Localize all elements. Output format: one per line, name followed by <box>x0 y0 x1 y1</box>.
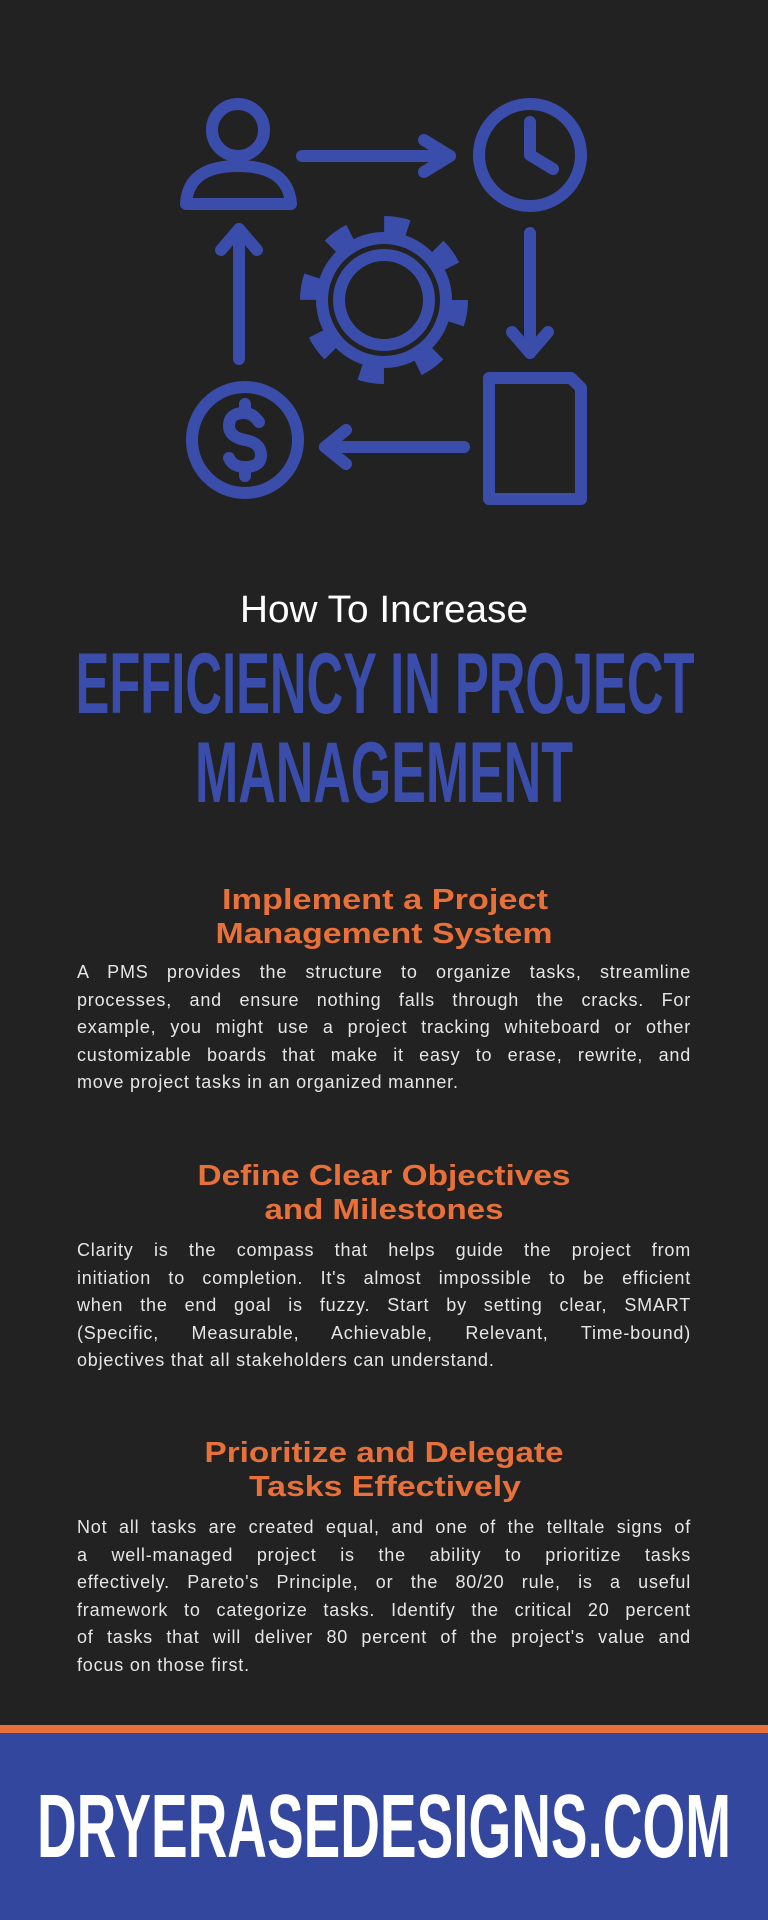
text 2: initiation to completion. It's almost impossible to be efficient <box>77 1268 691 1288</box>
text 1: example, you might use a project tracking whiteboard or other <box>77 1017 691 1037</box>
title <box>76 636 694 821</box>
text 3: of tasks that will deliver 80 percent of the project's value and <box>77 1627 691 1647</box>
text 3: effectively. Pareto's Principle, or the 80/20 rule, is a useful <box>77 1572 691 1592</box>
text 2: when the end goal is fuzzy. Start by setting clear, SMART <box>77 1295 691 1315</box>
icon: workflow cycle <box>180 98 587 505</box>
text 1: move project tasks in an organized manner. <box>77 1072 459 1092</box>
heading 1: Management System <box>216 918 552 950</box>
icon: person <box>186 104 291 204</box>
arrow: left <box>325 430 464 464</box>
heading 2 <box>198 1160 570 1226</box>
text 1: customizable boards that make it easy to erase, rewrite, and <box>77 1045 691 1065</box>
heading 3: Tasks Effectively <box>249 1471 521 1503</box>
heading 1: Implement a Project <box>222 884 548 916</box>
heading 3 <box>204 1437 564 1503</box>
arrow: down <box>512 233 548 353</box>
text 2: Clarity is the compass that helps guide the project from <box>77 1240 691 1260</box>
footer <box>0 1725 768 1920</box>
text 2 <box>77 1240 691 1370</box>
heading 2: and Milestones <box>264 1194 504 1226</box>
icon: gear <box>309 225 459 375</box>
text 3: a well-managed project is the ability to prioritize tasks <box>77 1545 691 1565</box>
arrow: right <box>302 140 450 172</box>
heading 1 <box>216 884 552 950</box>
text 2: objectives that all stakeholders can understand. <box>77 1350 495 1370</box>
text 1 <box>77 962 691 1092</box>
text 1: processes, and ensure nothing falls through the cracks. For <box>77 990 691 1010</box>
text 3 <box>77 1517 691 1675</box>
text 1: A PMS provides the structure to organize tasks, streamline <box>77 962 691 982</box>
arrow: up <box>221 229 257 359</box>
icon: clock <box>479 104 581 206</box>
heading 2: Define Clear Objectives <box>198 1160 570 1192</box>
text 2: (Specific, Measurable, Achievable, Relevant, Time-bound) <box>77 1323 691 1343</box>
text 3: framework to categorize tasks. Identify the critical 20 percent <box>77 1600 691 1620</box>
subtitle: How To Increase <box>240 589 528 631</box>
icon: dollar coin <box>192 387 298 493</box>
heading 3: Prioritize and Delegate <box>204 1437 564 1469</box>
text 3: focus on those first. <box>77 1655 250 1675</box>
icon: document <box>489 378 581 499</box>
text 3: Not all tasks are created equal, and one of the telltale signs of <box>77 1517 691 1537</box>
